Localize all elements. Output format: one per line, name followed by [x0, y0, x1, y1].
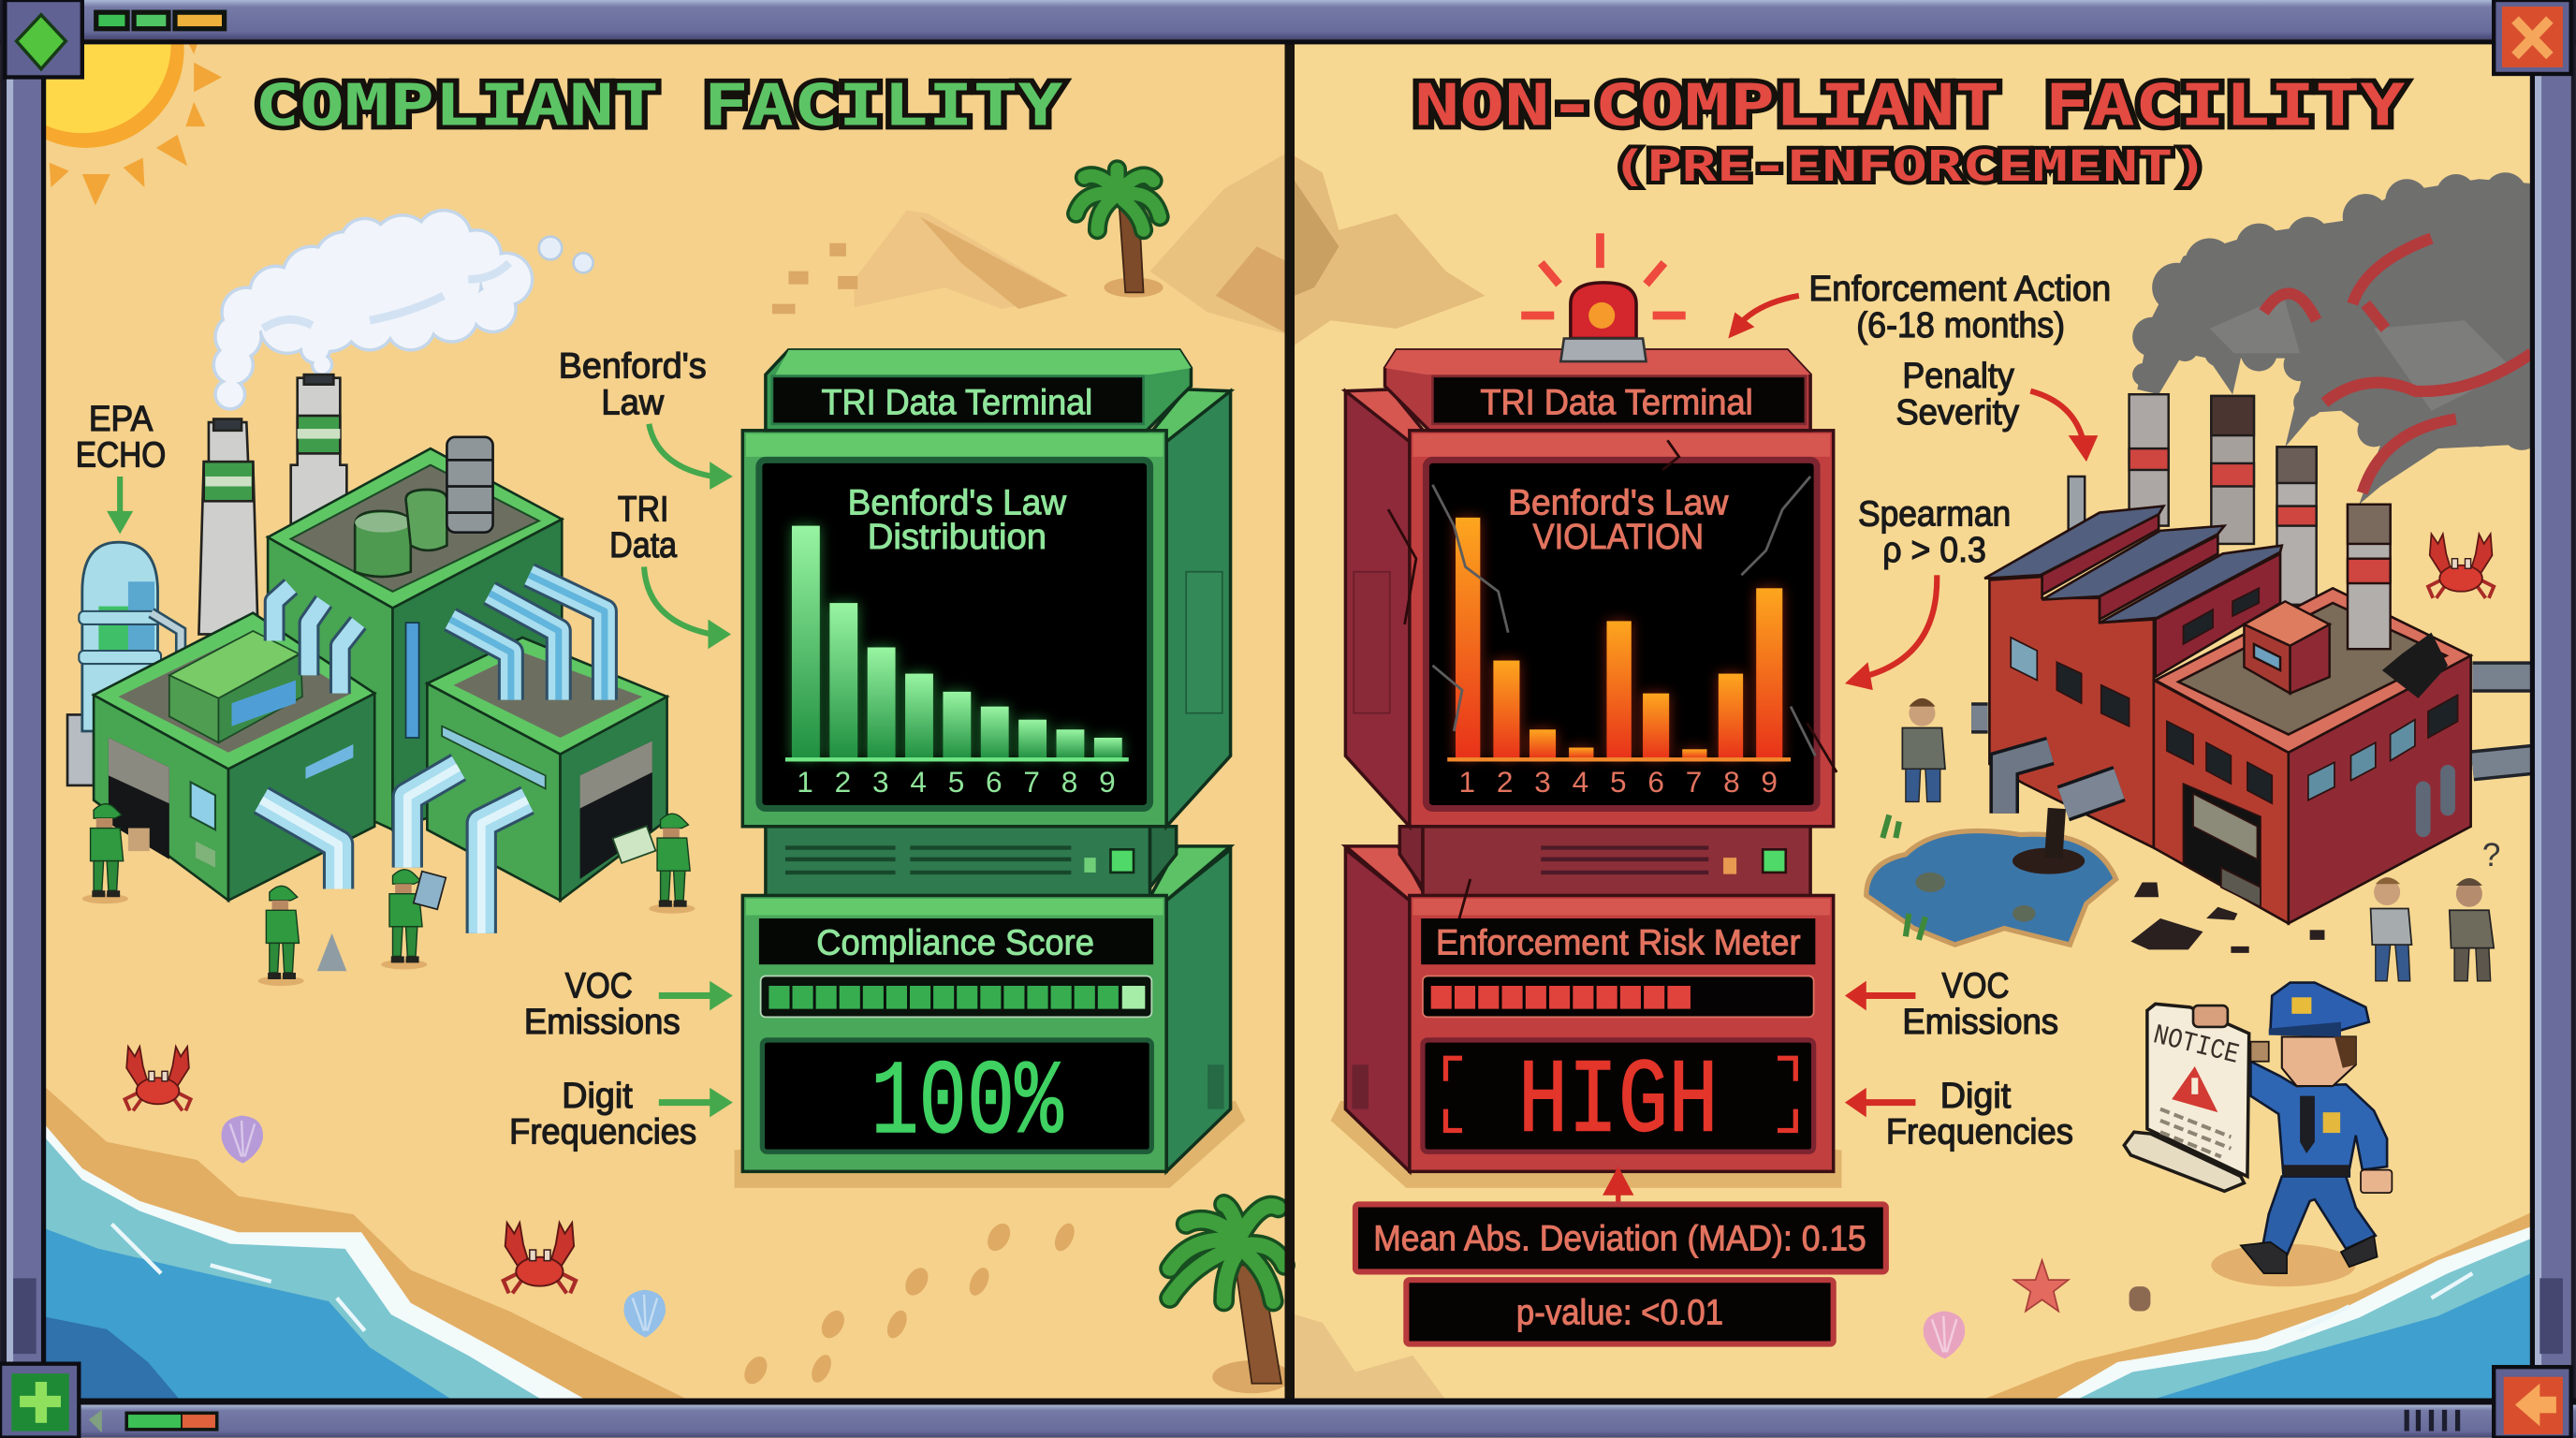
pipes: behind building [1971, 677, 2539, 766]
corner button: back arrow [2494, 1367, 2571, 1438]
axis digits: 6 [1647, 765, 1664, 799]
callout: Spearman rho: ρ > 0.3 [1882, 530, 1986, 569]
status bar widget: left [89, 1410, 218, 1432]
axis digits: 1 [797, 765, 813, 799]
status bar widget: right [2407, 1410, 2458, 1431]
smoke streaks: red [2263, 238, 2532, 493]
callout: EPA ECHO: ECHO [76, 434, 166, 474]
title: non-compliant facility: NON-COMPLIANT FACILITY [1414, 72, 2405, 139]
panel: red TRI data terminal [1331, 233, 1841, 1188]
risk meter: partial [1423, 976, 1814, 1017]
corner button: green gem [5, 0, 82, 77]
panel: green TRI data terminal [735, 350, 1245, 1188]
axis digits: 2 [835, 765, 851, 799]
title: compliant facility: COMPLIANT FACILITY [255, 72, 1063, 139]
callout: Digit Frequencies [1845, 1076, 2073, 1151]
bystanders [1902, 698, 2500, 981]
callout: VOC Emissions: Emissions [1902, 1002, 2058, 1041]
callout: VOC Emissions: VOC [565, 965, 633, 1005]
notice scroll: NOTICE [2150, 1019, 2242, 1071]
screen: Benford violation chart: VIOLATION [1532, 517, 1704, 556]
notice scroll [2124, 1004, 2249, 1191]
sand dunes: right panel [1295, 156, 1486, 1400]
left rail [0, 0, 46, 1438]
windows: broken panes [2011, 588, 2458, 907]
callout: EPA ECHO [76, 399, 166, 534]
callout: Digit Frequencies: Digit [1940, 1076, 2012, 1115]
screen cracks [1432, 477, 1815, 756]
callout: Enforcement Action [1728, 269, 2111, 345]
axis digits [797, 765, 1116, 799]
callout: VOC Emissions [1845, 965, 2058, 1041]
callout: Digit Frequencies: Digit [562, 1076, 633, 1115]
readout: HIGH: HIGH [1518, 1042, 1719, 1162]
beach items: right panel [1924, 534, 2494, 1358]
tower block [268, 437, 562, 829]
pipes: glass conduit, upper [274, 575, 605, 700]
callout: Benford's Law: Law [601, 382, 665, 421]
smoke: white plume [212, 209, 593, 411]
callout: Penalty Severity [1895, 356, 2098, 462]
callout: Digit Frequencies [509, 1076, 733, 1151]
beacon: red alarm light [1521, 233, 1686, 361]
bar glow [792, 526, 1122, 759]
screen: Benford distribution chart: Benford's Law [848, 482, 1067, 521]
axis digits: 3 [872, 765, 889, 799]
progress meter: full [761, 976, 1151, 1017]
crabs and shells: left panel [124, 1047, 666, 1338]
stat box: p-value [1406, 1280, 1834, 1344]
axis digits: 8 [1723, 765, 1740, 799]
title: non-compliant facility [1414, 72, 2405, 191]
screen: Benford violation chart: Benford's Law [1508, 482, 1729, 521]
footprints [739, 1220, 1078, 1388]
label: Compliance Score [759, 918, 1153, 964]
callout: Digit Frequencies: Frequencies [1886, 1111, 2073, 1151]
axis digits: 3 [1534, 765, 1551, 799]
label: TRI Data Terminal: TRI Data Terminal [822, 382, 1092, 421]
callout: VOC Emissions: VOC [1942, 965, 2009, 1005]
man: confused [2371, 877, 2411, 981]
callout: Penalty Severity: Penalty [1902, 356, 2014, 395]
chimneys: green-banded stacks [198, 374, 346, 634]
stat box: p-value: p-value: <0.01 [1516, 1293, 1723, 1332]
callout: Benford's Law: Benford's [559, 346, 707, 386]
callout: Digit Frequencies: Frequencies [509, 1111, 696, 1151]
palm tree: upper [1076, 169, 1164, 298]
callout: TRI Data: TRI [618, 489, 668, 528]
chimneys: rear stacks [2069, 394, 2317, 605]
callout: Enforcement Action: (6-18 months) [1856, 305, 2065, 345]
label: Enforcement Risk Meter: Enforcement Risk Meter [1436, 923, 1801, 962]
ocean: lower left [33, 1077, 698, 1405]
callout: Benford's Law [559, 346, 733, 490]
callout: Spearman rho [1845, 494, 2011, 690]
axis digits: 7 [1686, 765, 1702, 799]
stat box: MAD: Mean Abs. Deviation (MAD): 0.15 [1373, 1219, 1866, 1258]
bottom bar [0, 1399, 2576, 1438]
stat box: MAD [1355, 1204, 1886, 1271]
screen: Benford distribution chart [759, 460, 1150, 808]
workers [82, 804, 695, 986]
callout: VOC Emissions: Emissions [524, 1002, 681, 1041]
screen: Benford distribution chart: Distribution [868, 517, 1046, 556]
ocean: lower right [1969, 1210, 2539, 1405]
discharge pipes and tar [2004, 751, 2324, 953]
terminal cabinet: green [742, 350, 1231, 1171]
palm tree: lower [1170, 1204, 1292, 1393]
axis digits: 6 [986, 765, 1003, 799]
callout: Enforcement Action: Enforcement Action [1808, 269, 2111, 308]
terminal cabinet: red [1345, 350, 1834, 1171]
axis digits [1459, 765, 1778, 799]
bars: digits 1-9 [1456, 518, 1782, 759]
wall pipes [2423, 772, 2448, 829]
pond: contaminated runoff [1866, 814, 2116, 945]
right block [427, 638, 667, 901]
label: TRI Data Terminal: TRI Data Terminal [1480, 382, 1753, 421]
readout: 100%: 100% [871, 1044, 1063, 1164]
subtitle: pre-enforcement: (PRE-ENFORCEMENT) [1612, 141, 2208, 191]
neck vents and LEDs [1541, 848, 1786, 874]
axis digits: 9 [1761, 765, 1778, 799]
axis digits: 4 [910, 765, 927, 799]
smoke: dark plume [2132, 172, 2541, 505]
axis digits: 2 [1497, 765, 1513, 799]
sun [0, 0, 222, 205]
callout: Spearman rho: Spearman [1858, 494, 2011, 534]
readout: HIGH [1423, 1040, 1814, 1162]
callout: Penalty Severity: Severity [1895, 392, 2019, 432]
callout: VOC Emissions [524, 965, 733, 1041]
pipes: glass conduit, lower [261, 768, 527, 933]
label: TRI Data Terminal [772, 376, 1144, 424]
illustration: polluting factory [1971, 172, 2541, 923]
callout: EPA ECHO: EPA [89, 399, 154, 438]
axis digits: 9 [1099, 765, 1116, 799]
axis digits: 4 [1573, 765, 1588, 799]
plume outline [212, 209, 534, 411]
man: confused with question mark [2450, 837, 2500, 981]
factory building: red brick [1984, 506, 2471, 923]
axis digits: 8 [1061, 765, 1077, 799]
label: TRI Data Terminal [1432, 376, 1806, 424]
title bar [0, 0, 2576, 44]
readout: 100% [762, 1040, 1151, 1164]
title bar indicators [94, 10, 227, 31]
callout: TRI Data [609, 489, 731, 649]
axis digits: 5 [948, 765, 964, 799]
divider [1284, 43, 1295, 1403]
man by pond [1902, 698, 1945, 801]
left block [94, 613, 374, 901]
man: confused with question mark: ? [2482, 837, 2500, 873]
plume body [215, 212, 531, 407]
screen: Benford violation chart [1426, 460, 1817, 808]
storage tank: blue [67, 542, 181, 785]
corner button: green plus [0, 1364, 79, 1438]
axis digits: 1 [1459, 765, 1475, 799]
label: Compliance Score: Compliance Score [816, 923, 1094, 962]
corner button: close [2494, 0, 2571, 74]
right rail [2530, 0, 2576, 1438]
axis digits: 5 [1610, 765, 1627, 799]
police officer [2241, 983, 2392, 1273]
bars: digits 1-9 [792, 526, 1122, 759]
cabinet cracks [1388, 440, 1837, 936]
callout: TRI Data: Data [609, 525, 677, 565]
sand dunes: left panel [772, 151, 1290, 335]
axis digits: 7 [1023, 765, 1040, 799]
arrow: MAD to terminal [1606, 1171, 1630, 1203]
neck vents and LEDs [785, 848, 1134, 873]
illustration: green compliant factory [67, 209, 695, 986]
cube and front stack [2244, 505, 2448, 698]
bar glow [1456, 518, 1782, 759]
